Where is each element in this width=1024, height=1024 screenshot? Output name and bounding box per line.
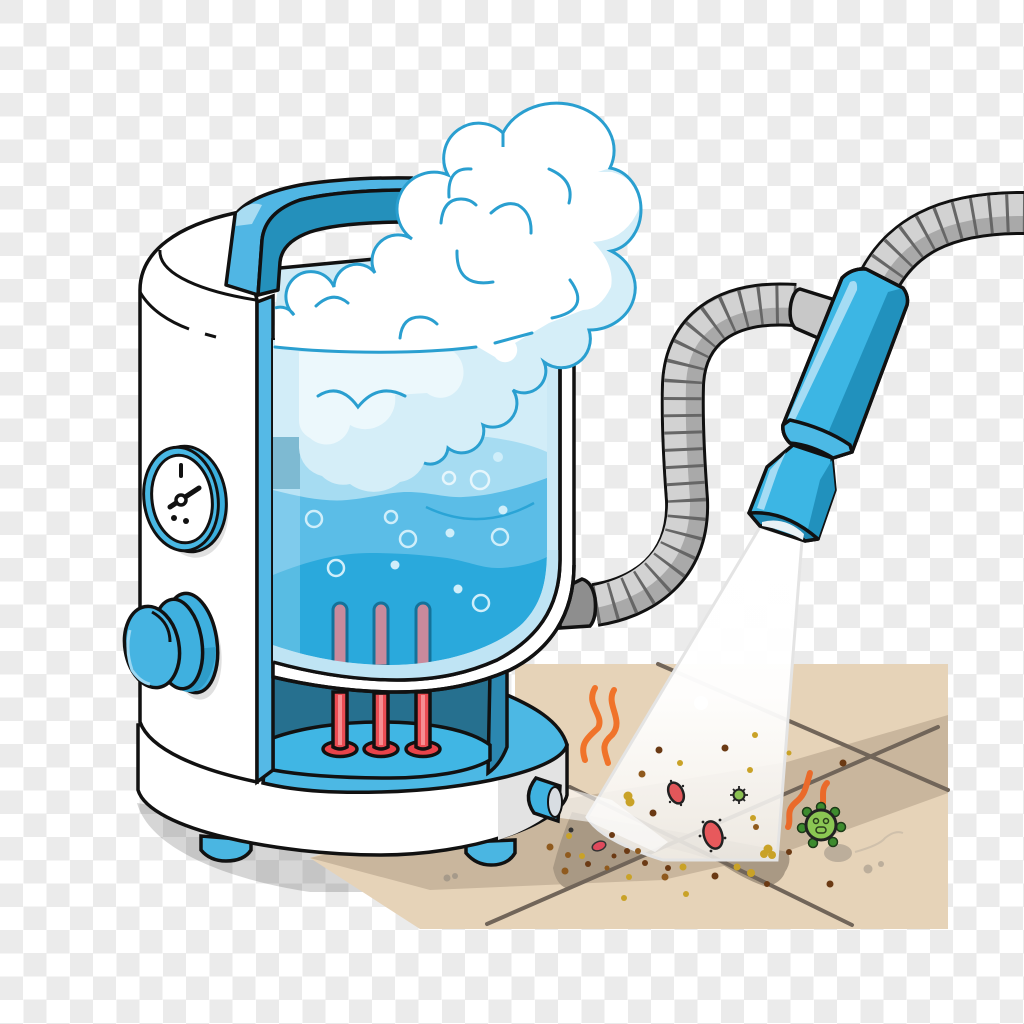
cloud inner curls — [275, 169, 578, 407]
floor shadow band — [310, 715, 948, 890]
heating elements below tank — [323, 692, 440, 756]
wand body — [783, 269, 908, 458]
dirty wet patch — [553, 812, 789, 888]
hose ribs — [595, 304, 795, 605]
tile floor — [310, 664, 948, 929]
upper hose ribs — [878, 213, 1024, 282]
heating rods in water — [333, 603, 430, 666]
top rim curve — [160, 250, 256, 300]
solid bubbles — [390, 452, 508, 594]
wand collar — [783, 420, 852, 458]
pressure gauge — [137, 441, 235, 563]
pale cloud mass — [275, 103, 641, 492]
small germ left — [591, 839, 607, 853]
cloud outline — [275, 103, 641, 464]
base ring — [138, 700, 567, 855]
hose collar at wand — [790, 289, 835, 338]
glass tank — [273, 340, 574, 692]
rod highlights — [338, 695, 425, 745]
back hose — [590, 297, 795, 605]
feet — [201, 836, 251, 861]
steam cloud — [275, 103, 642, 492]
seam line — [140, 292, 216, 337]
machine base — [138, 664, 567, 865]
base shade — [498, 748, 565, 840]
floor shadow under machine — [137, 803, 560, 892]
inner pale cloud — [299, 352, 464, 445]
wand nozzle — [749, 269, 908, 541]
small virus — [730, 786, 748, 804]
control knob — [118, 590, 228, 703]
grey stain — [444, 832, 903, 882]
nozzle opening — [762, 520, 804, 540]
blue door strip — [257, 296, 273, 782]
gauge needle — [170, 465, 199, 507]
inner disc — [273, 722, 490, 778]
bacterium two — [699, 819, 726, 852]
glass lower outline — [273, 360, 560, 680]
glass bottom edge redraw — [273, 565, 574, 692]
knob back shade — [172, 647, 216, 692]
interior back wall — [273, 665, 492, 760]
water ripple — [426, 503, 534, 519]
carrying handle — [226, 178, 412, 312]
machine body — [140, 213, 273, 782]
heat waves left — [583, 688, 617, 763]
upper hose — [872, 205, 1024, 282]
white cloud — [275, 103, 642, 362]
spout jet — [560, 788, 668, 852]
grout lines — [487, 664, 948, 925]
virus face — [814, 818, 828, 833]
gauge dots — [171, 515, 189, 524]
bubbles — [306, 471, 508, 611]
knob highlight — [128, 630, 150, 684]
spray highlight — [694, 696, 708, 710]
water layers — [273, 340, 553, 680]
nozzle flare — [749, 445, 835, 541]
blue deck — [263, 695, 567, 792]
tank outer wall — [273, 340, 574, 692]
hose collar at tank — [560, 579, 595, 628]
dirt particles — [444, 732, 903, 901]
floor spout — [528, 778, 562, 821]
spray cone — [560, 527, 802, 860]
interior column — [488, 664, 507, 773]
heat waves right — [788, 773, 827, 827]
nozzle mouth — [749, 513, 818, 541]
glass inner wall — [273, 340, 560, 680]
handle highlight — [236, 204, 262, 226]
glass lower band — [273, 550, 560, 680]
large green virus — [798, 802, 846, 848]
bacterium one — [665, 780, 687, 806]
